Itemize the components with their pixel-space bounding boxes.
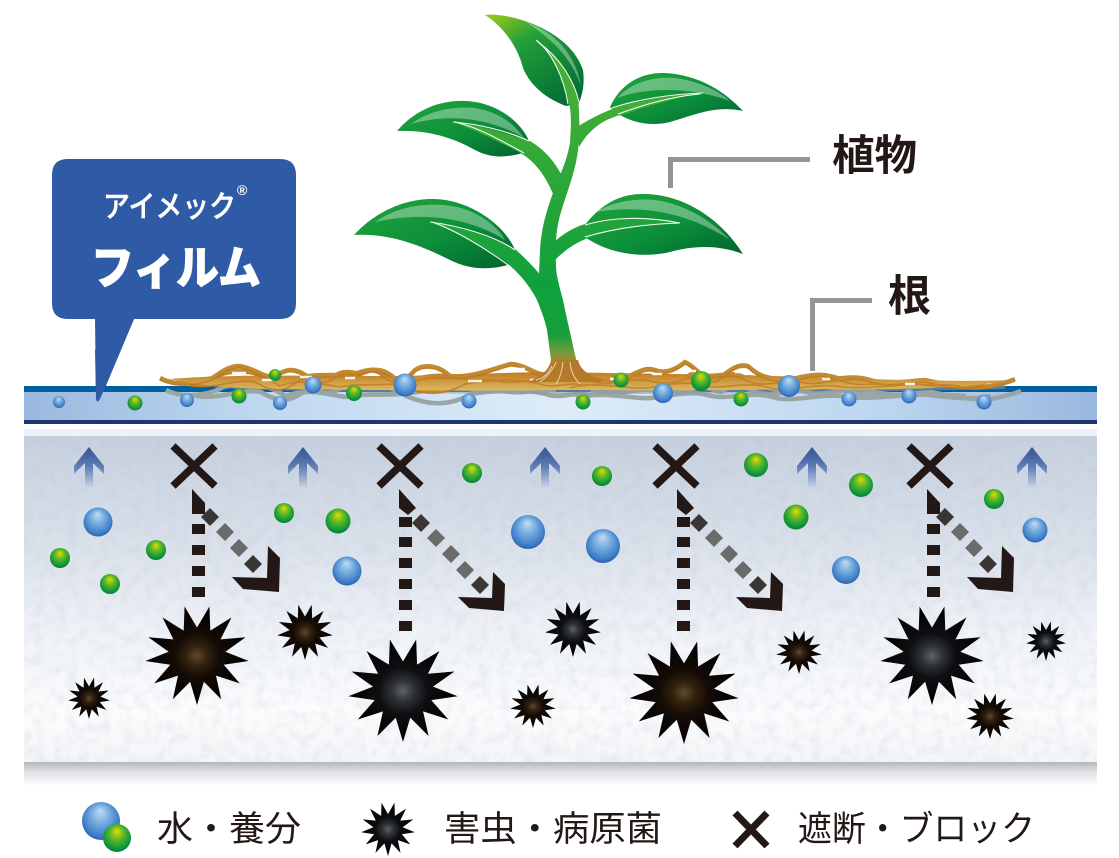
lower left leaf <box>354 199 515 268</box>
lower right leaf <box>585 194 743 255</box>
upper left leaf <box>397 101 529 156</box>
legend: water and nutrients <box>82 802 301 852</box>
legend: pests <box>361 803 662 856</box>
blocked arrows group 3 <box>677 489 783 631</box>
icon: balls <box>82 802 131 852</box>
upper right leaf <box>610 73 743 124</box>
callout small title: アイメック <box>103 191 236 224</box>
film particles <box>53 369 992 410</box>
plant <box>354 15 743 384</box>
blocked arrows group 4 <box>927 489 1014 597</box>
icon: star <box>361 803 415 856</box>
registered mark: ® <box>237 182 248 198</box>
root crown <box>528 360 604 384</box>
soil layer <box>24 429 1097 786</box>
legend text: water: 水・養分 <box>157 810 301 849</box>
top leaf <box>485 15 584 106</box>
label line: plant <box>670 160 810 188</box>
roots <box>160 362 1021 403</box>
callout: film label <box>52 159 296 402</box>
root gaps <box>232 369 915 384</box>
label: plant: 植物 <box>832 132 917 179</box>
blocked arrows group 1 <box>192 489 280 597</box>
blocked arrows group 2 <box>399 489 505 631</box>
icon: cross <box>735 813 767 846</box>
up arrows <box>74 447 1047 487</box>
soil particles <box>50 453 1048 594</box>
callout large title: フィルム <box>91 242 261 294</box>
leaf veins <box>430 40 703 265</box>
legend text: pests: 害虫・病原菌 <box>444 810 662 849</box>
legend text: block: 遮断・ブロック <box>798 810 1035 849</box>
branches and stem <box>430 40 703 368</box>
label: root: 根 <box>888 273 931 321</box>
block marks <box>173 446 951 486</box>
legend: block <box>735 810 1035 849</box>
film layer <box>24 386 1097 424</box>
pests and pathogens <box>68 602 1066 744</box>
callout tail over film <box>95 319 134 402</box>
label line: root <box>812 300 872 371</box>
